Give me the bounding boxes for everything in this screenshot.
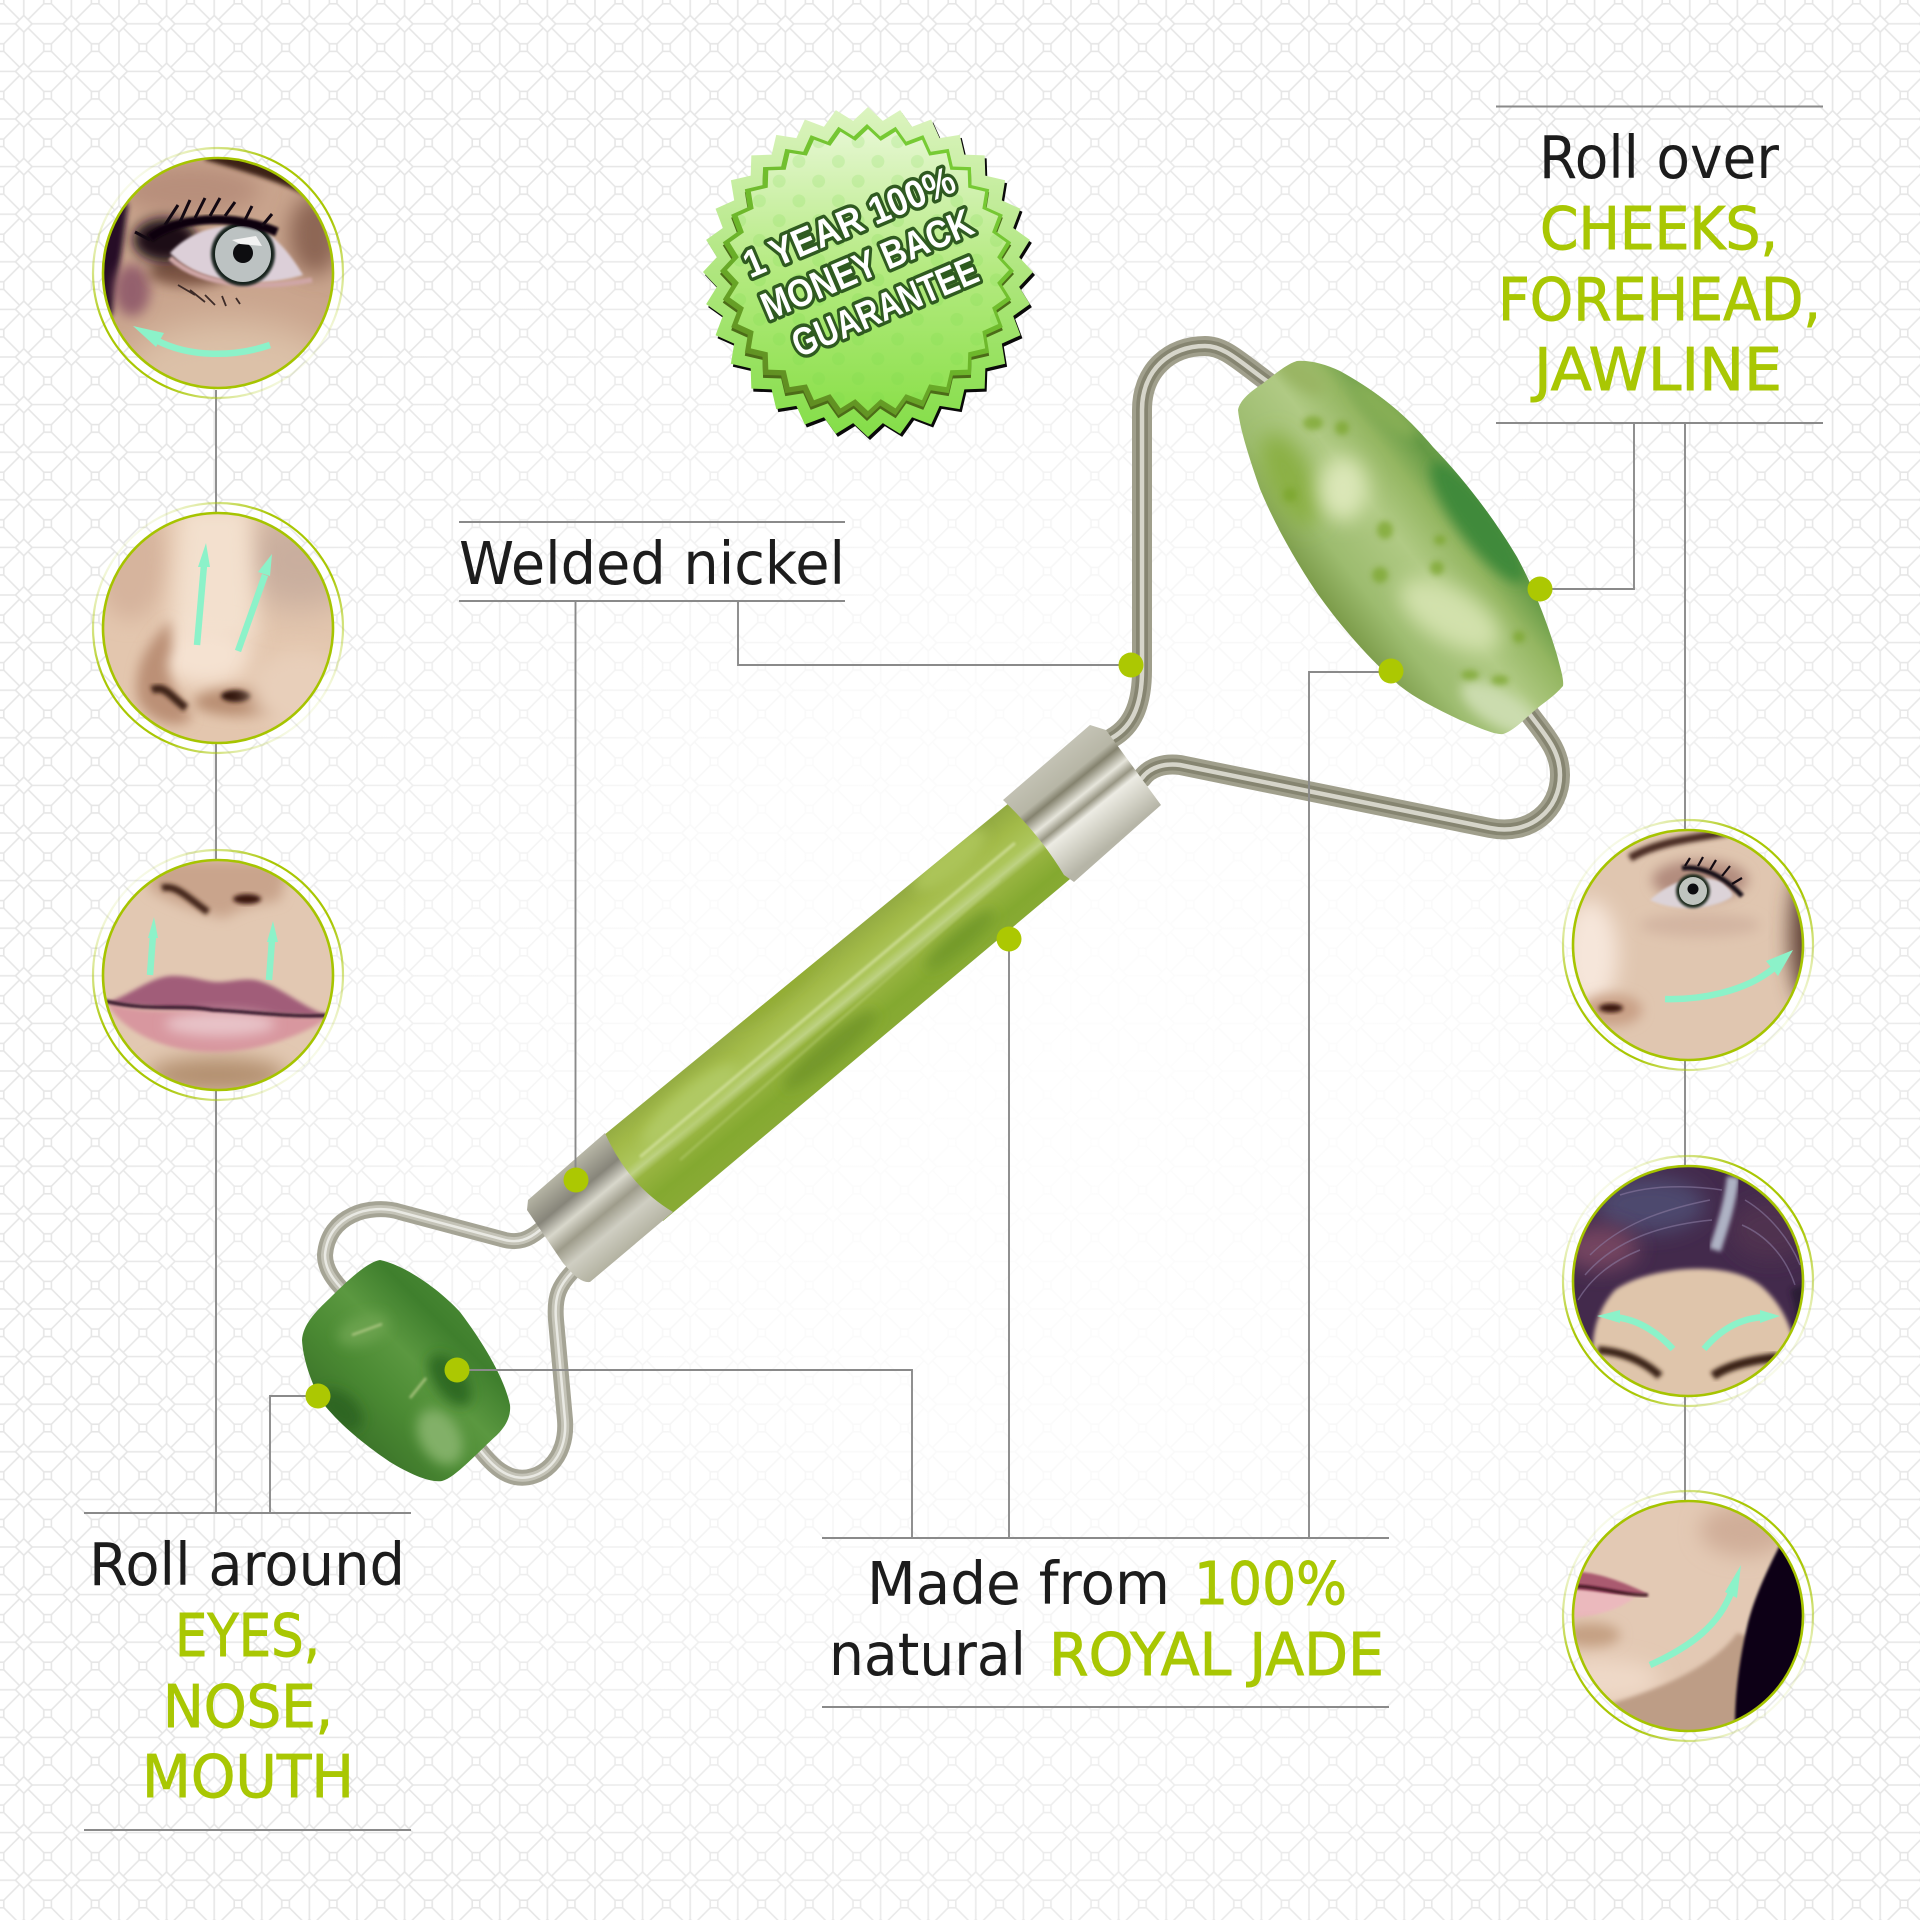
callout: made from natural royal jade [822, 1538, 1389, 1707]
callout: made from natural royal jade: ROYAL JADE [1049, 1620, 1384, 1689]
badge text: 1 YEAR 100% [737, 159, 962, 287]
callout: roll around eyes nose mouth: MOUTH [142, 1742, 354, 1811]
callout: roll over cheeks forehead jawline: FOREHEAD, [1498, 265, 1821, 334]
large jade roller head [1238, 360, 1564, 734]
callout: roll around eyes nose mouth: NOSE, [163, 1672, 333, 1741]
icon: jawline massage circle [1540, 1491, 1815, 1741]
callout: roll around eyes nose mouth: Roll around [89, 1530, 405, 1599]
leader lines [216, 390, 1685, 1538]
upper metal collar [1003, 725, 1161, 882]
lower metal collar [527, 1133, 673, 1282]
badge text: MONEY BACK [755, 201, 980, 329]
callout: made from natural royal jade: 100% [1194, 1549, 1347, 1618]
icon: mouth massage circle [93, 850, 343, 1100]
jade handle [606, 804, 1070, 1221]
jade roller product [290, 340, 1580, 1490]
callout: roll over cheeks forehead jawline: Roll over [1539, 123, 1780, 192]
guarantee badge [703, 107, 1035, 440]
callout: made from natural royal jade: natural [829, 1620, 1026, 1689]
icon: eye area massage circle [93, 148, 343, 430]
callout: made from natural royal jade: Made from [867, 1549, 1170, 1618]
callout: roll around eyes nose mouth: EYES, [175, 1601, 320, 1670]
small jade roller head [302, 1260, 510, 1482]
callout: roll over cheeks forehead jawline: JAWLINE [1530, 335, 1782, 404]
callout: roll around eyes nose mouth [84, 1513, 411, 1830]
callout: welded nickel: Welded nickel [459, 529, 845, 598]
nickel wire frame [325, 346, 1560, 1478]
icon: nose massage circle [93, 500, 360, 753]
icon: forehead massage circle [1560, 1156, 1815, 1406]
callout dots [306, 576, 1552, 1408]
badge text: GUARANTEE [786, 249, 985, 366]
callout: roll over cheeks forehead jawline: CHEEKS, [1540, 194, 1778, 263]
callout: roll over cheeks forehead jawline [1496, 106, 1823, 423]
badge text [737, 159, 998, 372]
icon: cheek massage circle [1562, 820, 1826, 1070]
